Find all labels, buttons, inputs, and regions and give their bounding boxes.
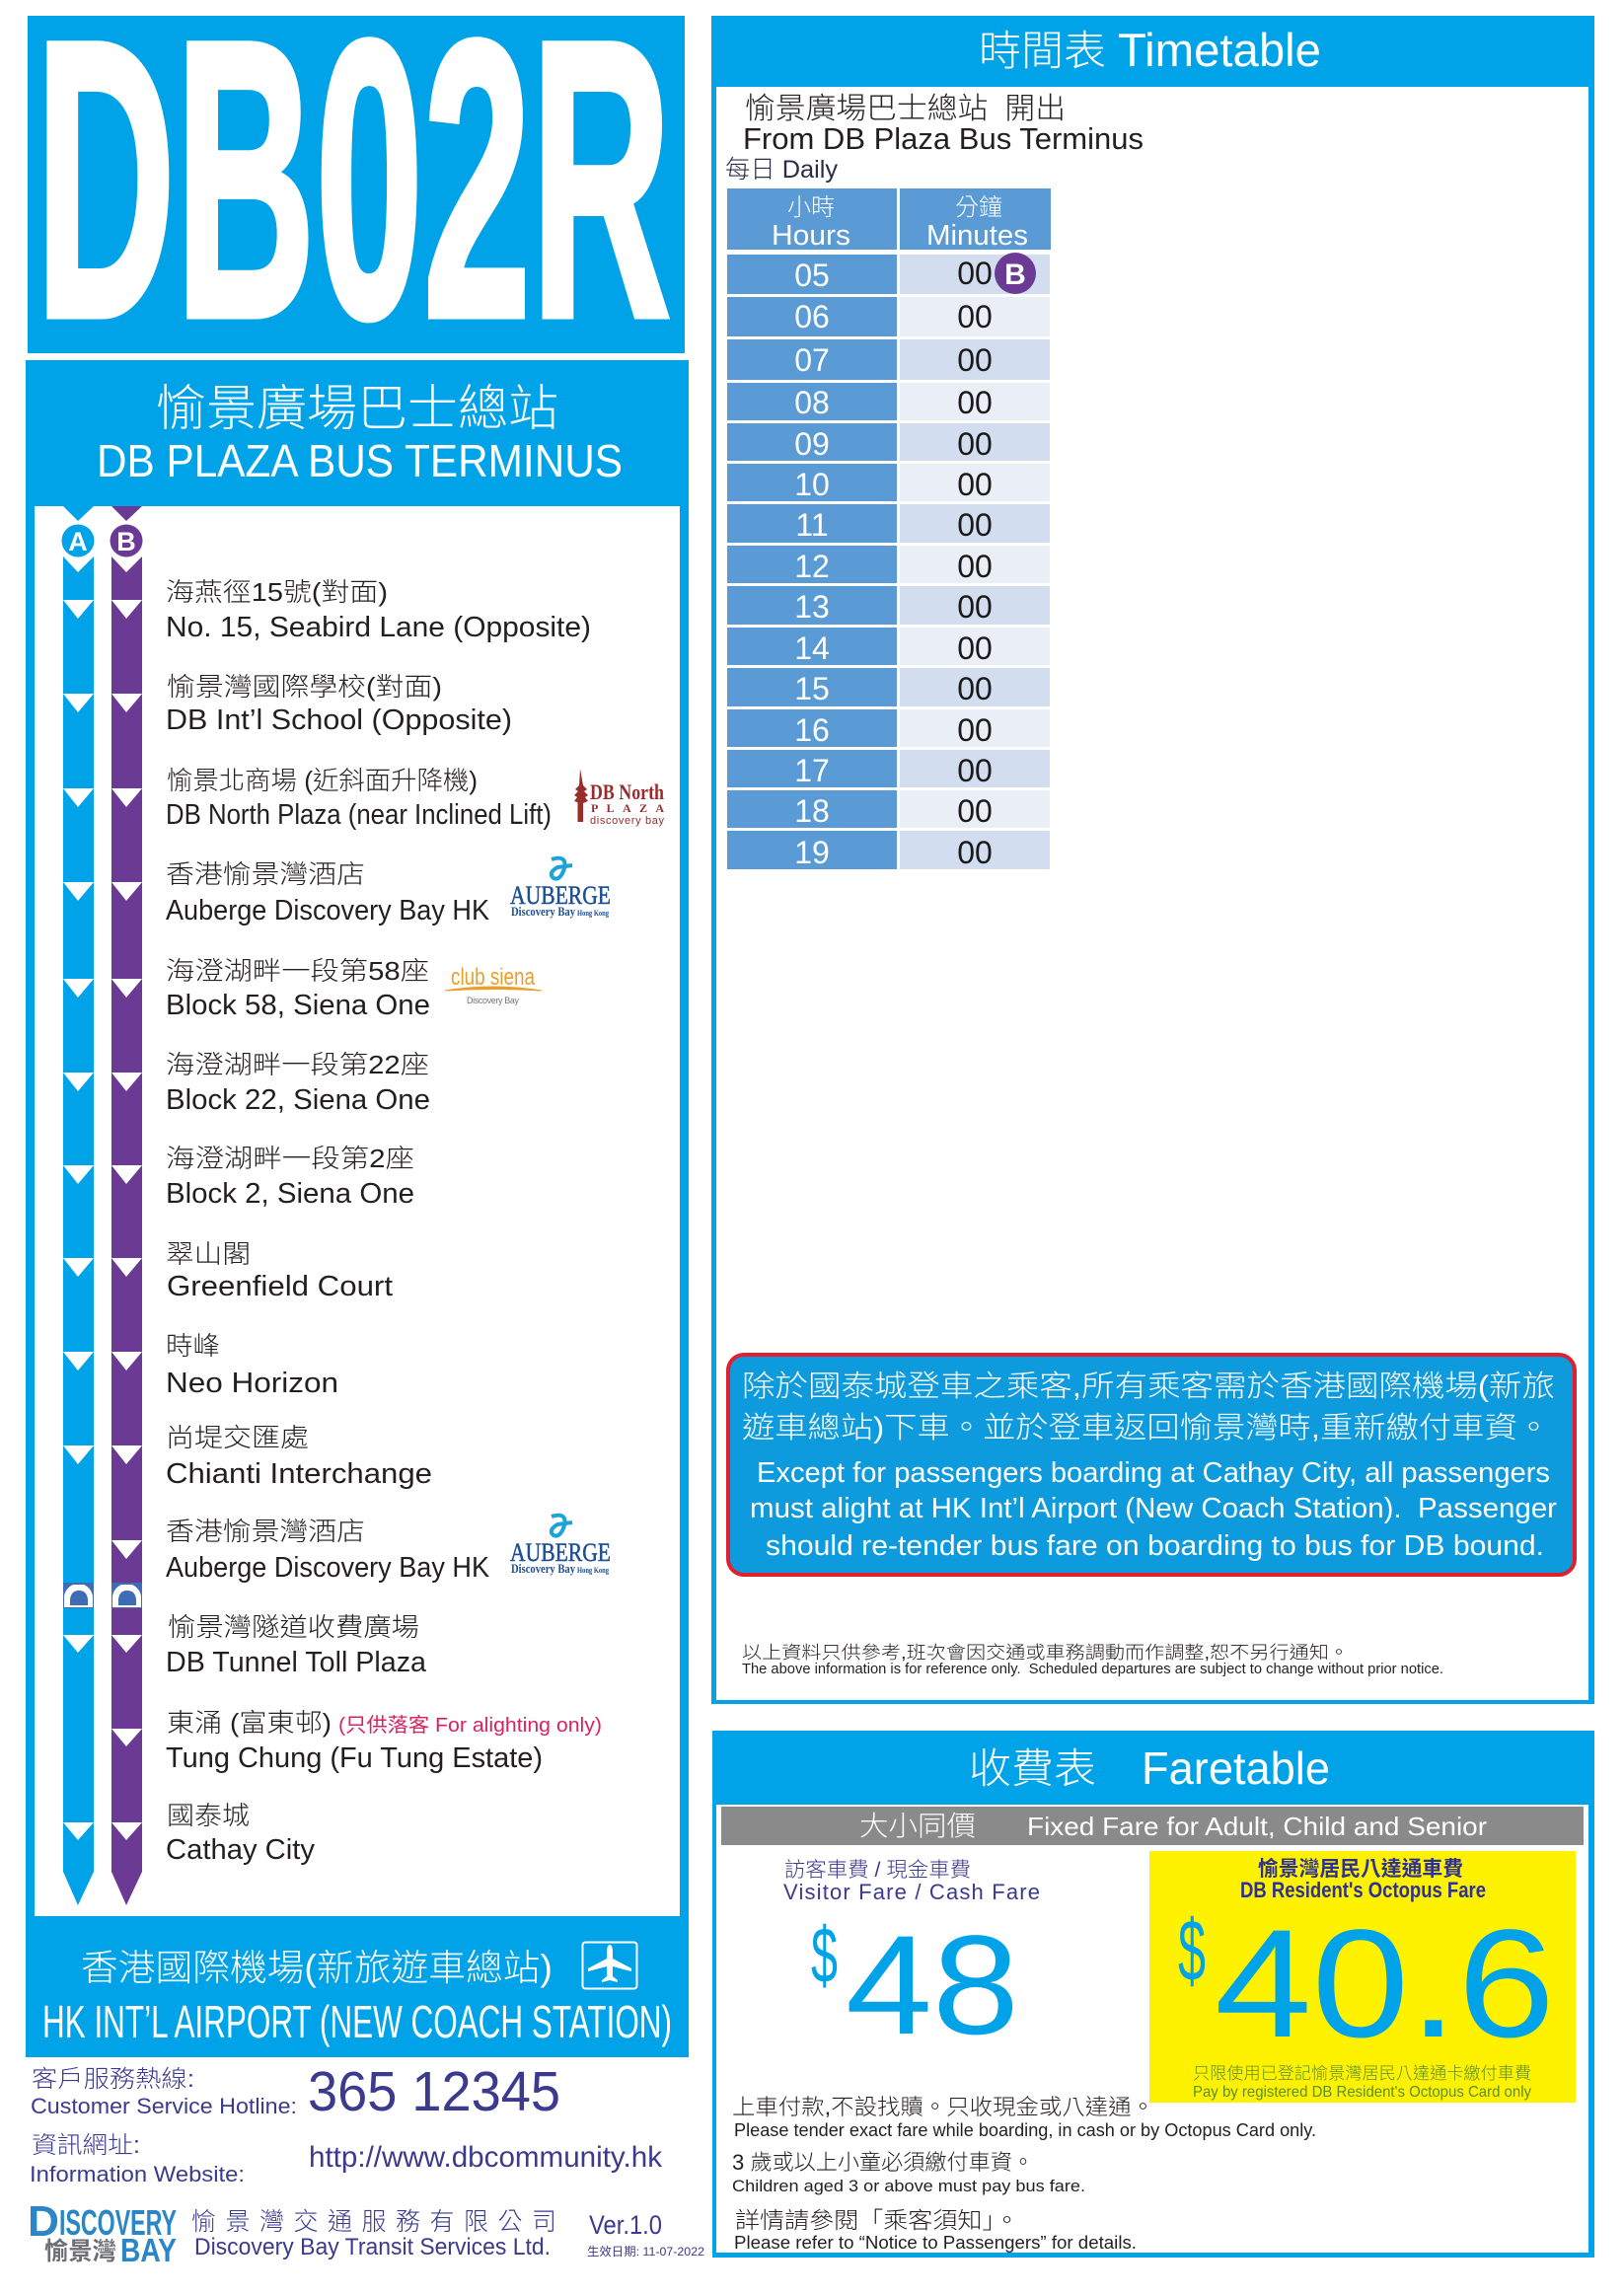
timetable table [727, 188, 1051, 870]
stop: Tung Chung: 東涌 (富東邨) [167, 1708, 332, 1738]
stop: DB Tunnel Toll Plaza [166, 1612, 427, 1678]
logo: Discovery Bay: 愉景灣 [44, 2238, 116, 2265]
fare: resident octopus: 只限使用已登記愉景灣居民八達通卡繳付車費 [1193, 2064, 1531, 2083]
stop: Greenfield Court: 翠山閣 [166, 1239, 251, 1269]
heading: timetable: 時間表 [979, 28, 1106, 74]
stop: DB Intl School: DB Int’l School (Opposite) [166, 704, 512, 736]
timetable table: 12 [794, 549, 830, 584]
fare: visitor cash: 48 [846, 1907, 1019, 2064]
fare: resident octopus: $ [1178, 1901, 1206, 1999]
fare notes: 上車付款,不設找贖。只收現金或八達通。 [732, 2095, 1154, 2119]
timetable table: 07 [794, 342, 830, 378]
logo: DB North Plaza [574, 769, 665, 827]
banner: fixed fare: Fixed Fare for Adult, Child and Senior [1027, 1812, 1487, 1841]
hotline label: 客戶服務熱線: [32, 2066, 194, 2093]
fare: visitor cash [783, 1859, 1040, 2064]
fare: visitor cash: Visitor Fare / Cash Fare [783, 1880, 1040, 1904]
callout: airport notice: Except for passengers boarding at Cathay City, all passengers [757, 1457, 1550, 1489]
logo: Auberge repeat: AUBERGE [510, 1538, 611, 1567]
logo: Auberge: Discovery Bay [511, 904, 575, 919]
website url: http://www.dbcommunity.hk [309, 2141, 663, 2174]
logo: DB North Plaza: discovery bay [590, 815, 665, 827]
origin label: 愉景廣場巴士總站 開出 [745, 93, 1066, 125]
timetable table: 08 [794, 385, 830, 420]
timetable table: 00 [957, 753, 993, 788]
contact block [30, 2060, 663, 2186]
badge: route B: B [1004, 259, 1026, 291]
stop: Auberge return: 香港愉景灣酒店 [166, 1517, 365, 1546]
stop: Tung Chung [166, 1708, 602, 1774]
heading: faretable [969, 1742, 1330, 1794]
stop: Auberge: 香港愉景灣酒店 [166, 859, 365, 889]
fare: visitor cash: 訪客車費 / 現金車費 [784, 1859, 971, 1882]
logo: DB North Plaza: DB North [590, 779, 664, 804]
heading: faretable: 收費表 [969, 1745, 1096, 1792]
panel: route number [28, 0, 685, 400]
company name: 愉景灣交通服務有限公司 [191, 2208, 556, 2236]
stop: Seabird Lane [166, 577, 591, 643]
timetable table: 00 [957, 507, 993, 543]
logo: Club Siena: club siena [451, 964, 536, 991]
stop: Neo Horizon: 時峰 [166, 1331, 220, 1361]
website label [30, 2132, 245, 2186]
timetable table: 00 [957, 299, 993, 334]
fare notes: 3 歲或以上小童必須繳付車資。 [732, 2150, 1034, 2175]
timetable table: 16 [794, 712, 830, 748]
callout: airport notice: 遊車總站)下車。並於登車返回愉景灣時,重新繳付車資。 [742, 1412, 1550, 1444]
stop: Block 58: 海澄湖畔一段第58座 [166, 956, 429, 986]
stop: Block 58 [166, 956, 430, 1021]
logo: DB North Plaza: PLAZA [591, 801, 664, 815]
stop: Auberge return: Auberge Discovery Bay HK [166, 1552, 490, 1584]
callout: airport notice [728, 1355, 1575, 1575]
stop: DB Intl School [166, 672, 512, 736]
stop: Chianti Interchange: 尚堤交匯處 [166, 1423, 309, 1452]
stop: Tung Chung: (只供落客 For alighting only) [338, 1714, 602, 1737]
stop: Block 22: Block 22, Siena One [166, 1084, 430, 1116]
panel: route diagram [26, 360, 689, 2057]
logo: Club Siena: Discovery Bay [467, 996, 519, 1005]
stop: Greenfield Court: Greenfield Court [167, 1271, 393, 1302]
stop: DB North Plaza [166, 766, 552, 831]
timetable table: 00 [957, 426, 993, 462]
stop: Cathay City: Cathay City [166, 1834, 315, 1866]
logo: Auberge repeat: Hong Kong [577, 1566, 609, 1575]
hotline label [31, 2066, 297, 2118]
timetable table: 00 [957, 589, 993, 625]
timetable table: 00 [957, 385, 993, 420]
fare notes: Please refer to “Notice to Passengers” for details. [734, 2233, 1137, 2253]
logo: Discovery Bay [28, 2197, 177, 2268]
panel: faretable [712, 1731, 1594, 2258]
fare: visitor cash: $ [811, 1911, 838, 1999]
stop list [166, 577, 602, 1866]
fare notes: Please tender exact fare while boarding, in cash or by Octopus Card only. [734, 2120, 1316, 2140]
header: hours: 小時 [787, 194, 835, 221]
timetable table: 00 [957, 671, 993, 706]
heading: timetable: Timetable [1118, 24, 1321, 76]
route line A [61, 506, 95, 1905]
stop: DB North Plaza: 愉景北商場 (近斜面升降機) [167, 766, 478, 795]
disclaimer: 以上資料只供參考,班次會因交通或車務調動而作調整,恕不另行通知。 [742, 1643, 1349, 1663]
company name: Discovery Bay Transit Services Ltd. [194, 2234, 551, 2260]
logo: Auberge [510, 858, 611, 919]
heading: origin terminus: 愉景廣場巴士總站 [156, 381, 558, 436]
stop: Chianti Interchange: Chianti Interchange [166, 1458, 432, 1490]
timetable table: 17 [794, 753, 830, 788]
website label: 資訊網址: [32, 2132, 140, 2159]
callout: airport notice: should re-tender bus fare on boarding to bus for DB bound. [766, 1530, 1544, 1562]
timetable table: 15 [794, 671, 830, 706]
fare: resident octopus: Pay by registered DB Resident's Octopus Card only [1193, 2084, 1531, 2101]
heading: faretable: Faretable [1142, 1742, 1330, 1794]
timetable table: 18 [794, 793, 830, 829]
callout: airport notice: 除於國泰城登車之乘客,所有乘客需於香港國際機場(新旅 [742, 1370, 1555, 1403]
stop: Tung Chung: Tung Chung (Fu Tung Estate) [166, 1742, 543, 1774]
banner: fixed fare [721, 1807, 1584, 1845]
version: 生效日期: 11-07-2022 [587, 2244, 704, 2259]
banner: fixed fare: 大小同價 [859, 1811, 976, 1841]
heading: origin terminus: DB PLAZA BUS TERMINUS [97, 435, 623, 486]
disclaimer: The above information is for reference only. Scheduled departures are subject to change without prior notice. [742, 1661, 1443, 1677]
stop: Neo Horizon [166, 1331, 338, 1399]
fare notes: 詳情請參閱「乘客須知」。 [735, 2207, 1019, 2233]
route line A: A [68, 527, 88, 556]
header: minutes [900, 188, 1051, 252]
version [587, 2210, 704, 2259]
heading: destination airport: HK INT’L AIRPORT (NEW COACH STATION) [42, 1996, 672, 2047]
stop: Cathay City: 國泰城 [167, 1801, 250, 1830]
company name [191, 2208, 556, 2260]
version: Ver.1.0 [589, 2210, 662, 2240]
timetable table: 00 [957, 793, 993, 829]
fare: resident octopus: 40.6 [1215, 1898, 1555, 2070]
logo: Discovery Bay: D [28, 2197, 59, 2246]
fare notes: Children aged 3 or above must pay bus fare. [732, 2177, 1085, 2195]
callout: airport notice: must alight at HK Int’l Airport (New Coach Station). Passenger [750, 1493, 1557, 1524]
logo: Auberge repeat [510, 1516, 611, 1576]
timetable table: 00 [957, 342, 993, 378]
stop: Seabird Lane: No. 15, Seabird Lane (Opposite) [166, 612, 591, 643]
stop: Block 2: 海澄湖畔一段第2座 [166, 1144, 414, 1173]
header: hours: Hours [772, 220, 850, 252]
stop: Block 22: 海澄湖畔一段第22座 [166, 1050, 429, 1079]
timetable table: 00 [957, 467, 993, 502]
logo: Auberge: Hong Kong [577, 909, 609, 918]
heading: destination airport [42, 1948, 672, 2047]
logo: Auberge repeat: Discovery Bay [511, 1561, 575, 1576]
timetable table: 09 [794, 426, 830, 462]
route line B [111, 506, 142, 1905]
route line B: B [116, 527, 136, 556]
stop: Chianti Interchange [166, 1423, 432, 1490]
icon: plane [582, 1942, 637, 1989]
stop: DB Tunnel Toll Plaza: 愉景灣隧道收費廣場 [168, 1612, 419, 1642]
fare: resident octopus: DB Resident's Octopus Fare [1240, 1878, 1486, 1902]
stop: Cathay City [166, 1801, 315, 1866]
logo: Auberge: AUBERGE [510, 881, 611, 910]
logo: Discovery Bay: ISCOVERY [59, 2202, 177, 2243]
disclaimer [742, 1643, 1443, 1677]
logo: Club Siena [445, 964, 542, 1005]
timetable table: 00 [957, 630, 993, 666]
timetable table: 00 [957, 256, 993, 291]
hotline label: Customer Service Hotline: [31, 2094, 297, 2118]
origin label [743, 93, 1144, 156]
stop: Neo Horizon: Neo Horizon [166, 1368, 338, 1399]
hotline number: 365 12345 [308, 2060, 560, 2123]
timetable table: 14 [794, 630, 830, 666]
heading: timetable [979, 24, 1321, 76]
timetable table: 11 [795, 507, 829, 543]
daily label: 每日 Daily [725, 156, 839, 184]
fare: resident octopus [1149, 1851, 1576, 2103]
heading: destination airport: 香港國際機場(新旅遊車總站) [81, 1948, 553, 1988]
header: minutes: 分鐘 [955, 194, 1002, 221]
stop: Seabird Lane: 海燕徑15號(對面) [166, 577, 388, 607]
header: minutes: Minutes [926, 220, 1028, 252]
stop: DB North Plaza: DB North Plaza (near Inclined Lift) [166, 799, 552, 831]
logo: Discovery Bay: BAY [120, 2232, 177, 2268]
fare: resident octopus: 愉景灣居民八達通車費 [1258, 1858, 1463, 1881]
stop: Block 22 [166, 1050, 430, 1116]
timetable table: 13 [794, 589, 830, 625]
heading: origin terminus [97, 381, 623, 486]
website label: Information Website: [30, 2162, 245, 2186]
stop: Auberge return [166, 1517, 490, 1584]
timetable table: 00 [957, 712, 993, 748]
stop: Block 2 [166, 1144, 414, 1210]
panel: timetable [711, 16, 1594, 1704]
origin label: From DB Plaza Bus Terminus [743, 121, 1144, 156]
header: hours [727, 188, 897, 252]
timetable table: 00 [957, 549, 993, 584]
badge: route B [995, 253, 1036, 294]
timetable table: 10 [794, 467, 830, 502]
stop: Block 2: Block 2, Siena One [166, 1178, 414, 1210]
timetable table: 06 [794, 299, 830, 334]
timetable table: 19 [794, 835, 830, 870]
stop: Auberge: Auberge Discovery Bay HK [166, 895, 490, 926]
stop: DB Tunnel Toll Plaza: DB Tunnel Toll Plaza [166, 1647, 427, 1678]
timetable table: 00 [957, 835, 993, 870]
fare notes [732, 2095, 1316, 2253]
stop: DB Intl School: 愉景灣國際學校(對面) [167, 672, 442, 702]
stop: Block 58: Block 58, Siena One [166, 990, 430, 1021]
stop: Auberge [166, 859, 490, 926]
stop: Greenfield Court [166, 1239, 393, 1302]
timetable table: 05 [794, 258, 830, 293]
